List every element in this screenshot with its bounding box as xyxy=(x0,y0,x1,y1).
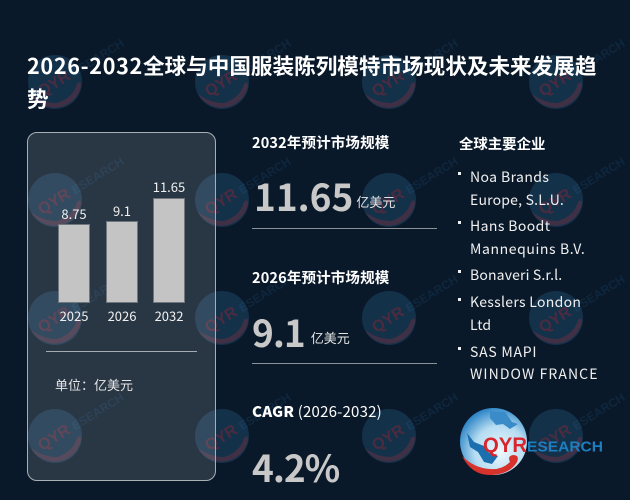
list: companies: Kesslers London xyxy=(470,292,581,312)
stat: 2026 value: 9.1 亿美元 xyxy=(252,304,350,358)
bar chart xyxy=(58,177,185,325)
list: companies: Noa Brands xyxy=(470,167,549,187)
logo: QYResearch xyxy=(460,408,603,475)
list: companies: Mannequins B.V. xyxy=(470,238,585,258)
bar 2032: 11.65 xyxy=(153,177,185,196)
bar 2032: 2032 xyxy=(155,306,183,325)
title: 2026-2032全球与中国服装陈列模特市场现状及未来发展趋势 xyxy=(27,50,596,114)
logo: QYResearch: QYR xyxy=(483,434,527,457)
stat: 2032 value: 11.65亿美元 xyxy=(254,168,395,222)
list: companies: Bonaveri S.r.l. xyxy=(470,265,562,285)
list: companies: Hans Boodt xyxy=(470,216,550,236)
list: companies: Europe, S.L.U. xyxy=(470,190,564,210)
bar 2025 xyxy=(58,204,90,325)
stat: CAGR value: 4.2% xyxy=(252,439,339,493)
list: companies: SAS MAPI xyxy=(470,342,537,362)
list: companies: WINDOW FRANCE xyxy=(470,364,599,384)
list: companies: Ltd xyxy=(470,314,491,334)
bar 2025: 2025 xyxy=(60,306,88,325)
bar 2026: 9.1 xyxy=(113,201,131,220)
bar 2025: 8.75 xyxy=(61,204,87,223)
heading: key companies: 全球主要企业 xyxy=(459,133,545,154)
unit note: 单位：亿美元 xyxy=(55,375,133,394)
logo: QYResearch: ESEARCH xyxy=(527,438,603,456)
heading: 2026 market size: 2026年预计市场规模 xyxy=(252,267,389,288)
heading: 2032 market size: 2032年预计市场规模 xyxy=(252,132,389,153)
bar 2026: 2026 xyxy=(108,306,136,325)
heading: CAGR: CAGR (2026-2032) xyxy=(252,401,382,422)
panel: bar chart card xyxy=(27,132,216,481)
bar 2032 xyxy=(153,177,185,325)
bar 2026 xyxy=(106,201,138,325)
list: companies xyxy=(458,167,599,384)
